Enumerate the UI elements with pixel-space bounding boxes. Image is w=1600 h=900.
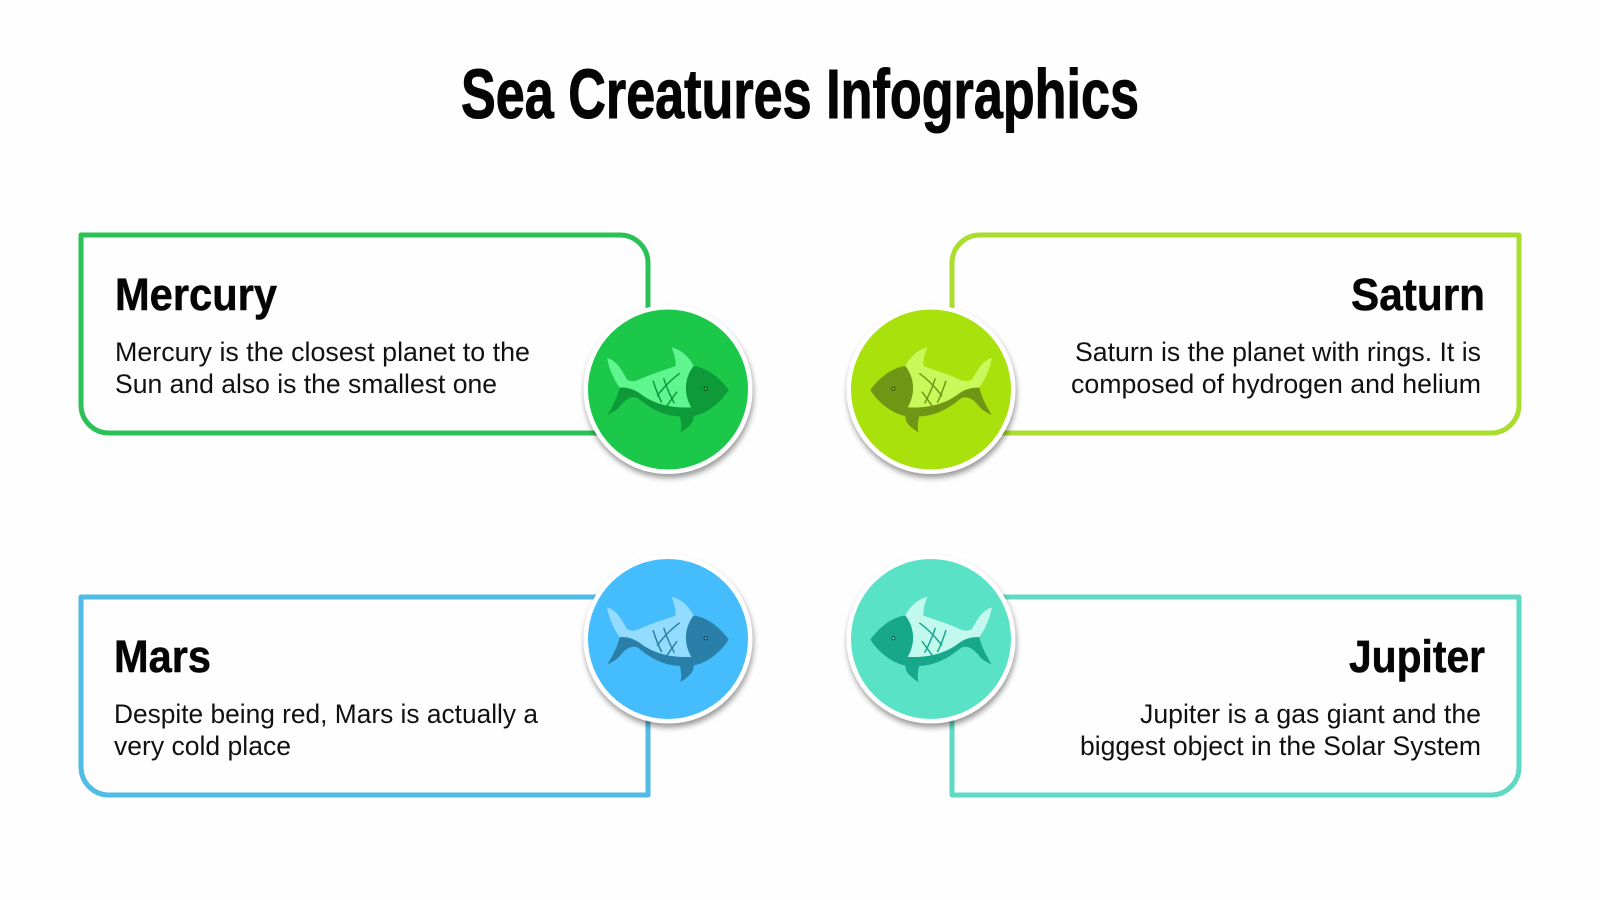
heading: Saturn: Saturn	[1351, 269, 1485, 320]
description: Mercury: Sun and also is the smallest one	[115, 369, 497, 399]
icon: Saturn fish badge	[846, 305, 1016, 474]
description: Mars: Despite being red, Mars is actually a	[114, 699, 538, 729]
icon: Mercury fish badge	[584, 305, 752, 474]
description: Jupiter	[1080, 699, 1481, 761]
icon: Mars fish badge	[584, 554, 752, 724]
panel: Mars	[81, 554, 752, 795]
box outline: Jupiter	[952, 597, 1519, 795]
box outline: Mars	[81, 597, 648, 795]
description: Mercury: Mercury is the closest planet to the	[115, 337, 530, 367]
icon: Jupiter fish badge	[846, 554, 1016, 724]
description: Mars	[114, 699, 538, 761]
description: Jupiter: biggest object in the Solar System	[1080, 731, 1481, 761]
heading: Mars: Mars	[114, 631, 211, 682]
description: Saturn: Saturn is the planet with rings. It is	[1075, 337, 1481, 367]
heading: Mercury: Mercury	[115, 269, 277, 320]
description: Mars: very cold place	[114, 731, 291, 761]
description: Saturn	[1071, 337, 1481, 399]
box outline: Saturn	[952, 235, 1519, 433]
panel: Mercury	[81, 235, 752, 474]
description: Saturn: composed of hydrogen and helium	[1071, 369, 1481, 399]
panel: Saturn	[846, 235, 1519, 474]
description: Jupiter: Jupiter is a gas giant and the	[1140, 699, 1481, 729]
title: Sea Creatures Infographics	[461, 55, 1139, 133]
box outline: Mercury	[81, 235, 648, 433]
panel: Jupiter	[846, 554, 1519, 795]
description: Mercury	[115, 337, 530, 399]
heading: Jupiter: Jupiter	[1349, 631, 1485, 682]
